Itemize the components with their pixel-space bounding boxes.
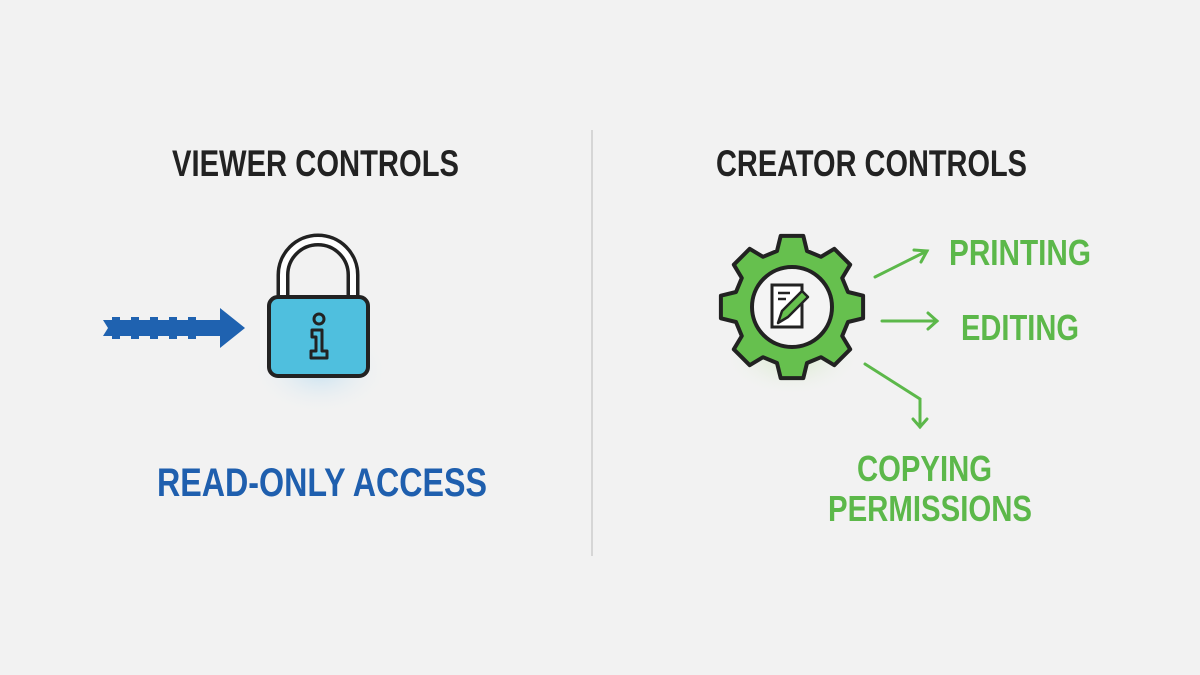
arrow: to copying [865,364,927,427]
icon: dotted blue arrow [103,308,245,348]
heading: creator controls: CREATOR CONTROLS [716,143,1027,184]
heading: viewer controls: VIEWER CONTROLS [172,143,459,184]
label: read-only access: READ-ONLY ACCESS [157,461,487,505]
label: copying permissions [828,448,1032,529]
label: copying permissions: COPYING [857,448,992,489]
arrow: to editing [882,313,937,329]
label: copying permissions: PERMISSIONS [828,488,1032,529]
label: printing: PRINTING [949,232,1091,273]
icon: padlock with info [250,240,390,415]
icon: gear with document [721,236,863,397]
label: editing: EDITING [961,307,1079,348]
arrow: to printing [875,250,927,277]
